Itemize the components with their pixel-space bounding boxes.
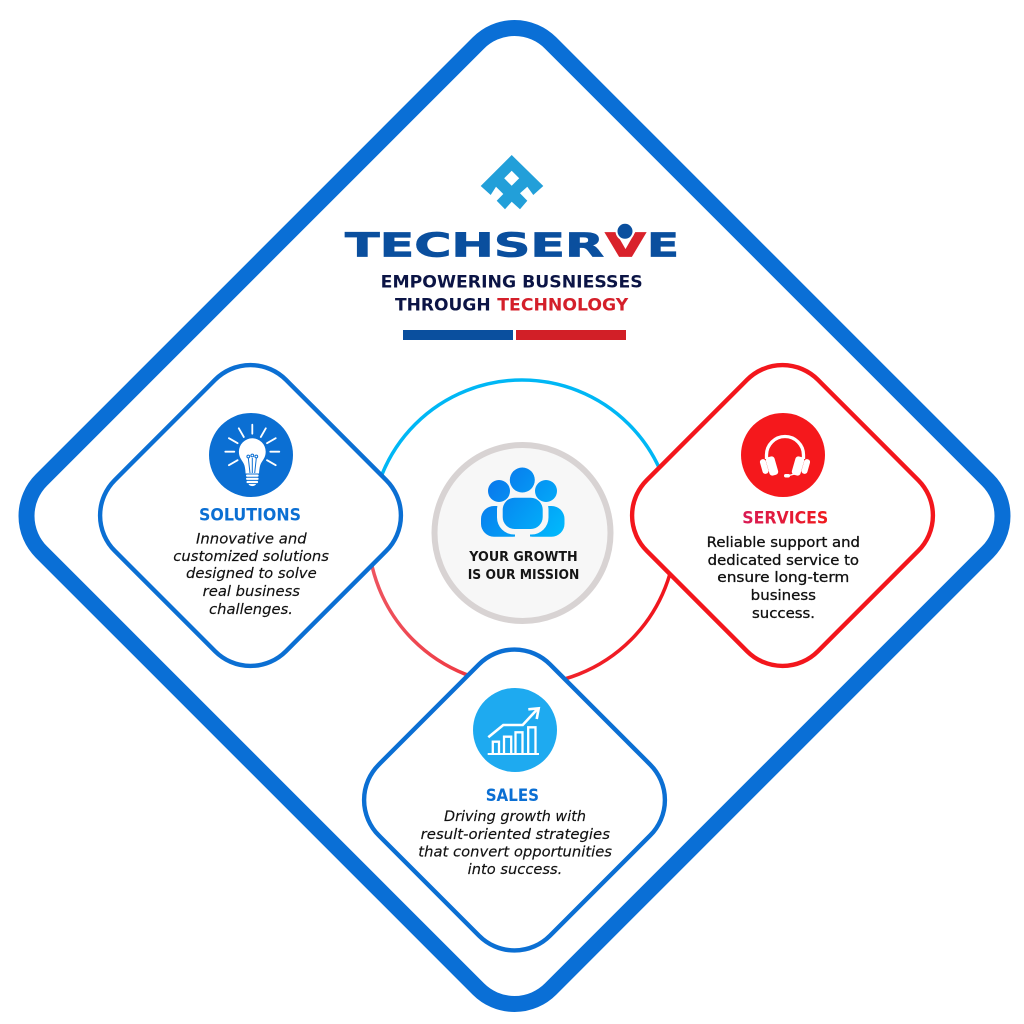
description: sales: into success. bbox=[468, 862, 562, 878]
icon: techserve logo mark bbox=[481, 155, 543, 209]
heading: sales: SALES bbox=[486, 785, 539, 805]
description: solutions: Innovative and bbox=[196, 532, 307, 548]
wordmark: TECHSERVE: TECHSER bbox=[345, 226, 604, 264]
description: solutions bbox=[173, 532, 329, 618]
mission text: YOUR GROWTH bbox=[468, 549, 578, 565]
description: sales bbox=[418, 809, 612, 878]
connecting ring bbox=[368, 380, 676, 685]
wordmark: TECHSERVE bbox=[345, 222, 679, 264]
header: logo and tagline bbox=[345, 155, 679, 340]
tagline: THROUGH bbox=[395, 296, 491, 316]
icon: headset bbox=[741, 413, 825, 497]
description: sales: result-oriented strategies bbox=[421, 827, 610, 843]
description: services: Reliable support and bbox=[707, 535, 860, 551]
heading: services: SERVICES bbox=[742, 507, 828, 527]
description: services: business bbox=[751, 588, 816, 604]
panel: services bbox=[611, 344, 954, 687]
mission text: IS OUR MISSION bbox=[468, 567, 579, 583]
description: services: success. bbox=[752, 606, 815, 622]
description: services: ensure long-term bbox=[717, 570, 849, 586]
center circle: your growth is our mission bbox=[434, 445, 610, 621]
tagline bbox=[381, 272, 643, 316]
panel: sales bbox=[343, 629, 686, 971]
icon: growth chart bbox=[473, 688, 557, 772]
wordmark: TECHSERVE: V bbox=[605, 226, 647, 264]
mission text bbox=[468, 549, 579, 583]
wordmark: TECHSERVE: E bbox=[647, 226, 679, 264]
description: solutions: challenges. bbox=[209, 602, 293, 618]
description: solutions: designed to solve bbox=[186, 566, 317, 582]
accent bars bbox=[403, 330, 626, 340]
description: solutions: real business bbox=[203, 584, 300, 600]
description: sales: that convert opportunities bbox=[418, 845, 612, 861]
description: services: dedicated service to bbox=[708, 553, 859, 569]
tagline: EMPOWERING BUSNIESSES bbox=[381, 272, 643, 292]
tagline: TECHNOLOGY bbox=[497, 296, 629, 316]
description: sales: Driving growth with bbox=[444, 809, 586, 825]
description: services bbox=[707, 535, 860, 622]
heading: solutions: SOLUTIONS bbox=[199, 505, 301, 525]
description: solutions: customized solutions bbox=[173, 549, 329, 565]
icon: people group bbox=[481, 468, 564, 538]
icon: light bulb bbox=[209, 413, 293, 497]
panel: solutions bbox=[79, 344, 422, 687]
